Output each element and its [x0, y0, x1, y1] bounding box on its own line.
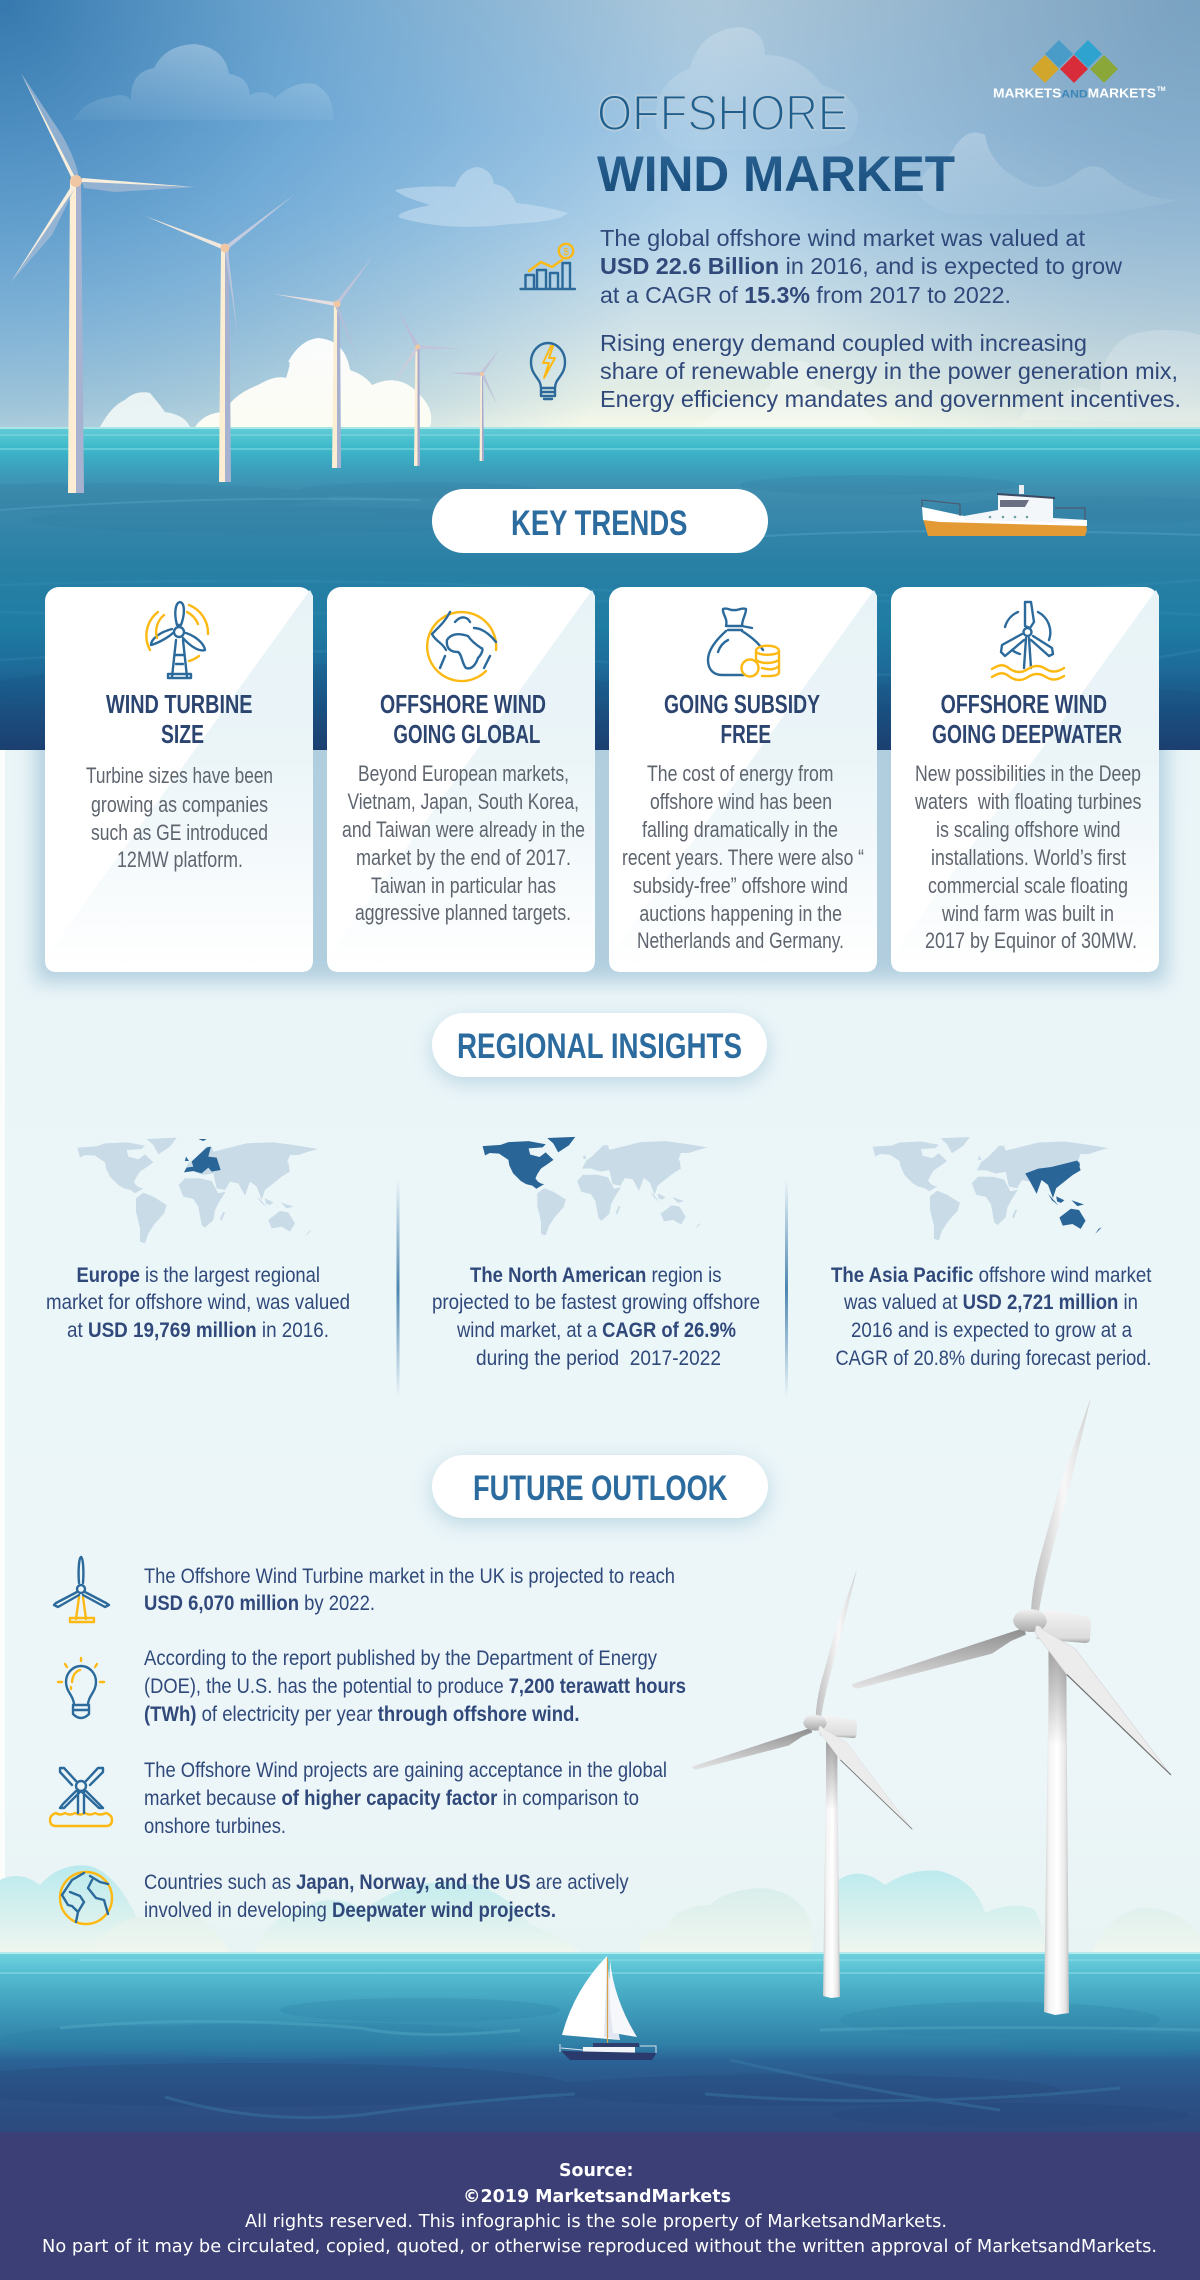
bottom sea — [0, 1952, 1200, 2132]
drivers text — [600, 330, 1181, 412]
title: WIND MARKET — [597, 146, 955, 202]
panel: wind turbine size — [45, 587, 313, 972]
title — [597, 84, 955, 202]
body text: recent years. There were also “ — [622, 845, 864, 870]
icon: bar chart with dollar coin — [520, 244, 575, 289]
outlook item: UK market: USD 6,070 million by 2022. — [144, 1591, 375, 1615]
large wind turbines — [692, 1397, 1171, 2015]
text: North America: during the period 2017-2022 — [476, 1347, 721, 1370]
heading pill: future outlook: FUTURE OUTLOOK — [473, 1469, 728, 1508]
panel: offshore wind going global — [327, 587, 595, 972]
body text: waters with floating turbines — [914, 789, 1142, 814]
market size text: at a CAGR of 15.3% from 2017 to 2022. — [600, 282, 1011, 308]
icon: globe — [60, 1872, 112, 1924]
heading pill: future outlook — [432, 1455, 768, 1524]
outlook item: DOE potential: (DOE), the U.S. has the potential to produce 7,200 terawatt hours — [144, 1674, 686, 1698]
body text: New possibilities in the Deep — [915, 761, 1141, 786]
panel: offshore wind going global: GOING GLOBAL — [393, 721, 540, 749]
boat — [922, 485, 1087, 536]
icon: light bulb with bolt — [531, 343, 565, 399]
outlook item: DOE potential — [58, 1646, 686, 1726]
body text: 2017 by Equinor of 30MW. — [925, 928, 1137, 953]
footer band: ©2019 MarketsandMarkets — [463, 2187, 731, 2207]
outlook item: UK market — [54, 1557, 675, 1622]
heading pill: key trends — [432, 489, 768, 553]
icon: globe — [427, 612, 496, 681]
text: North America: projected to be fastest growing offshore — [432, 1291, 760, 1314]
turbine 4 — [394, 308, 462, 466]
text: North America: wind market, at a CAGR of 26.9% — [456, 1319, 736, 1342]
icon: windmill on cloud — [50, 1768, 112, 1826]
world map: North America highlighted — [483, 1137, 707, 1235]
icon: bar chart with dollar coin: $ — [563, 247, 569, 258]
drivers text: Energy efficiency mandates and government incentives. — [600, 386, 1181, 412]
icon: wind turbine — [146, 602, 208, 678]
panel: wind turbine size: SIZE — [161, 721, 204, 749]
panel: going subsidy free: FREE — [720, 721, 771, 749]
logo: MarketsandMarkets: TM — [1157, 87, 1166, 93]
footer band — [0, 2132, 1200, 2280]
text: Europe — [46, 1264, 350, 1342]
world map: Asia Pacific highlighted — [873, 1137, 1108, 1240]
body text: market by the end of 2017. — [356, 845, 571, 870]
hero sea — [0, 427, 1200, 750]
panel: offshore wind going deepwater: GOING DEEPWATER — [932, 721, 1122, 749]
outlook item: capacity factor — [50, 1758, 667, 1838]
body text: Netherlands and Germany. — [637, 928, 844, 953]
outlook item: deepwater countries — [60, 1870, 629, 1924]
outlook item: DOE potential: According to the report published by the Department of Energy — [144, 1646, 657, 1670]
icon: turbine — [54, 1557, 109, 1622]
heading pill: regional insights: REGIONAL INSIGHTS — [457, 1027, 742, 1066]
body text: falling dramatically in the — [642, 817, 838, 842]
outlook item: deepwater countries: involved in developing Deepwater wind projects. — [144, 1898, 556, 1922]
text: Europe: at USD 19,769 million in 2016. — [67, 1319, 329, 1342]
pale content background — [0, 720, 1200, 1952]
heading pill: regional insights — [432, 1013, 768, 1083]
body text: is scaling offshore wind — [936, 817, 1120, 842]
drivers text: share of renewable energy in the power generation mix, — [600, 358, 1178, 384]
world map: Europe highlighted — [77, 1138, 318, 1243]
text: Asia Pacific: was valued at USD 2,721 million in — [843, 1291, 1138, 1314]
turbine 1 — [11, 73, 195, 493]
panel: going subsidy free: GOING SUBSIDY — [664, 691, 820, 719]
heading pill: key trends: KEY TRENDS — [511, 504, 688, 543]
sky clouds — [73, 27, 1200, 427]
body text: commercial scale floating — [928, 873, 1128, 898]
body text: The cost of energy from — [647, 761, 834, 786]
body text: auctions happening in the — [639, 901, 842, 926]
body text — [622, 761, 864, 953]
outlook item: capacity factor: The Offshore Wind projects are gaining acceptance in the global — [144, 1758, 667, 1782]
big turbine — [852, 1397, 1171, 2015]
panel: offshore wind going deepwater: OFFSHORE WIND — [941, 691, 1107, 719]
panel: offshore wind going deepwater — [891, 587, 1159, 972]
body text: installations. World’s first — [931, 845, 1126, 870]
body text: such as GE introduced — [91, 820, 268, 845]
turbine 2 — [145, 194, 295, 482]
text: North America — [432, 1264, 760, 1370]
body text — [342, 761, 585, 925]
footer band: Source: — [559, 2161, 634, 2181]
logo: MarketsandMarkets — [993, 40, 1166, 100]
title: OFFSHORE — [597, 84, 848, 141]
text: Europe: Europe is the largest regional — [76, 1264, 320, 1287]
body text: 12MW platform. — [117, 847, 243, 872]
body text: aggressive planned targets. — [355, 900, 571, 925]
body text: Vietnam, Japan, South Korea, — [348, 789, 579, 814]
body text: and Taiwan were already in the — [342, 817, 585, 842]
text: Asia Pacific: CAGR of 20.8% during forecast period. — [836, 1347, 1152, 1370]
outlook item: capacity factor: market because of higher capacity factor in comparison to — [144, 1786, 639, 1810]
body text: Beyond European markets, — [358, 761, 569, 786]
text: Europe: market for offshore wind, was valued — [46, 1291, 350, 1314]
outlook item: UK market: The Offshore Wind Turbine market in the UK is projected to reach — [144, 1564, 675, 1588]
hero sky background — [0, 0, 1200, 430]
drivers text: Rising energy demand coupled with increasing — [600, 330, 1087, 356]
hero wind turbines row — [11, 73, 500, 493]
text: Asia Pacific: The Asia Pacific offshore wind market — [831, 1264, 1152, 1287]
body text: offshore wind has been — [650, 789, 832, 814]
panel: wind turbine size: WIND TURBINE — [106, 691, 252, 719]
logo: MarketsandMarkets: MARKETS ANDMARKETS — [993, 86, 1156, 100]
small turbine — [692, 1568, 912, 1998]
body text: wind farm was built in — [941, 901, 1114, 926]
body text: Turbine sizes have been — [86, 763, 273, 788]
market size text — [600, 225, 1123, 308]
body text — [914, 761, 1142, 953]
market size text: USD 22.6 Billion in 2016, and is expected to grow — [600, 253, 1123, 279]
outlook item: deepwater countries: Countries such as Japan, Norway, and the US are actively — [144, 1870, 629, 1894]
turbine 5 — [448, 348, 500, 461]
turbine 3 — [274, 256, 373, 468]
text: Asia Pacific: 2016 and is expected to grow at a — [851, 1319, 1132, 1342]
panel: offshore wind going global: OFFSHORE WIND — [380, 691, 546, 719]
panel: going subsidy free — [609, 587, 877, 972]
icon: light bulb — [58, 1658, 104, 1718]
body text: growing as companies — [91, 792, 268, 817]
icon: money bag and coins — [708, 608, 779, 676]
bottom clouds — [0, 1865, 1200, 1952]
icon: floating turbine with waves — [992, 602, 1064, 680]
text: North America: The North American region is — [470, 1264, 722, 1287]
outlook item: capacity factor: onshore turbines. — [144, 1814, 286, 1838]
sailboat — [560, 1956, 656, 2060]
body text — [86, 763, 273, 872]
body text: Taiwan in particular has — [371, 873, 556, 898]
body text: subsidy-free” offshore wind — [633, 873, 848, 898]
footer band: No part of it may be circulated, copied, quoted, or otherwise reproduced without the written approval of MarketsandMarkets. — [42, 2237, 1157, 2257]
outlook item: DOE potential: (TWh) of electricity per year through offshore wind. — [144, 1702, 580, 1726]
footer band: All rights reserved. This infographic is the sole property of MarketsandMarkets. — [245, 2212, 947, 2232]
market size text: The global offshore wind market was valued at — [600, 225, 1085, 251]
text: Asia Pacific — [831, 1264, 1152, 1370]
